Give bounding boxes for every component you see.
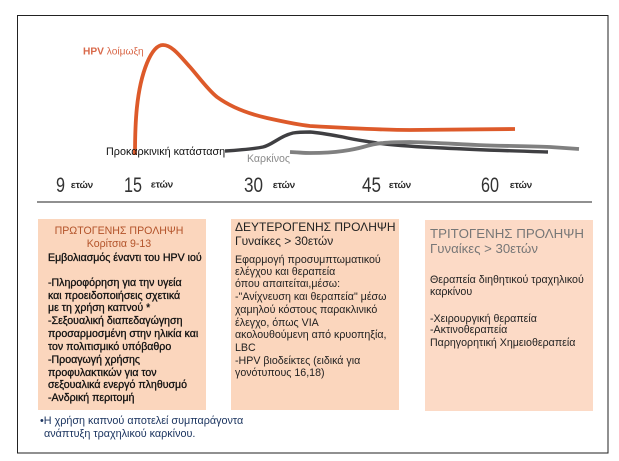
heading: tertiary prevention: ΤΡΙΤΟΓΕΝΗΣ ΠΡΟΛΗΨΗ	[430, 226, 584, 241]
primary prevention text: -Ανδρική περιτομή	[48, 392, 135, 404]
curve: HPV infection	[135, 45, 515, 155]
primary prevention text: με τη χρήση καπνού *	[48, 302, 150, 314]
primary prevention text: -Πληροφόρηση για την υγεία	[48, 277, 182, 289]
secondary prevention text: -"Ανίχνευση και θεραπεία" μέσω	[235, 291, 386, 303]
label: cancer: Καρκίνος	[247, 153, 290, 165]
primary prevention text: τον πολιτισμικό υπόβαθρο	[48, 341, 171, 353]
tertiary prevention text: -Χειρουργική θεραπεία	[430, 313, 537, 325]
panel: primary prevention	[38, 219, 206, 410]
age axis labels: ετών	[273, 180, 296, 190]
secondary prevention text: έλεγχο, όπως VIA	[235, 317, 320, 329]
label: precancerous state: Προκαρκινική κατάσταση	[106, 146, 225, 158]
age axis labels: 15	[124, 174, 142, 197]
primary prevention text: σεξουαλικά ενεργό πληθυσμό	[48, 379, 187, 391]
primary prevention text	[48, 252, 202, 404]
footnote: •Η χρήση καπνού αποτελεί συμπαράγοντα	[40, 415, 243, 427]
tertiary prevention text: καρκίνου	[430, 286, 472, 298]
line chart: disease progression by age	[37, 45, 592, 202]
age axis labels: 45	[362, 174, 381, 197]
age axis labels: ετών	[71, 180, 94, 190]
secondary prevention text: -HPV βιοδείκτες (ειδικά για	[235, 355, 360, 367]
primary prevention text: -Προαγωγή χρήσης	[48, 354, 140, 366]
age axis labels	[56, 174, 533, 197]
age axis line	[37, 201, 592, 203]
curve: precancerous state	[225, 132, 548, 152]
secondary prevention text: γονότυπους 16,18)	[235, 367, 325, 379]
age axis labels: 30	[244, 174, 263, 197]
secondary prevention text: χαμηλού κόστους παρακλινικό	[235, 304, 377, 316]
primary prevention text: προφυλακτικών για τον	[48, 367, 157, 379]
tertiary prevention text: -Ακτινοθεραπεία	[430, 324, 507, 336]
subheading: women over 30: Γυναίκες > 30ετών	[235, 234, 333, 248]
subheading: girls 9-13: Κορίτσια 9-13	[87, 238, 151, 250]
age axis labels: ετών	[151, 180, 174, 190]
age axis labels: 60	[481, 174, 499, 197]
heading: secondary prevention: ΔΕΥΤΕΡΟΓΕΝΗΣ ΠΡΟΛΗΨΗ	[235, 220, 396, 234]
primary prevention text: -Σεξουαλική διαπεδαγώγηση	[48, 315, 183, 327]
primary prevention text: και προειδοποιήσεις σχετικά	[48, 290, 180, 302]
curve: cancer	[290, 142, 579, 153]
secondary prevention text: LBC	[235, 342, 256, 354]
age axis labels: ετών	[510, 180, 533, 190]
tertiary prevention text	[430, 274, 584, 349]
label: HPV infection: HPV λοίμωξη	[83, 46, 144, 58]
age axis labels: 9	[56, 174, 65, 197]
panel: secondary prevention	[231, 219, 399, 410]
secondary prevention text: ακολουθούμενη από κρυοπηξία,	[235, 329, 386, 341]
secondary prevention text: όπου απαιτείται,μέσω:	[235, 278, 340, 290]
tertiary prevention text: Θεραπεία διηθητικού τραχηλικού	[430, 274, 584, 286]
heading: primary prevention: ΠΡΩΤΟΓΕΝΗΣ ΠΡΟΛΗΨΗ	[55, 225, 183, 237]
subheading: women over 30: Γυναίκες > 30ετών	[430, 241, 538, 256]
primary prevention text: Εμβολιασμός έναντι του HPV ιού	[48, 252, 202, 264]
secondary prevention text	[235, 254, 386, 379]
primary prevention text: προσαρμοσμένη στην ηλικία και	[48, 328, 199, 340]
secondary prevention text: ελέγχου και θεραπεία	[235, 266, 335, 278]
panel: tertiary prevention	[425, 220, 593, 411]
footnote: ανάπτυξη τραχηλικού καρκίνου.	[44, 428, 195, 440]
age axis labels: ετών	[389, 180, 412, 190]
tertiary prevention text: Παρηγορητική Χημειοθεραπεία	[430, 337, 575, 349]
secondary prevention text: Εφαρμογή προσυμπτωματικού	[235, 254, 381, 266]
footnote	[40, 415, 243, 440]
